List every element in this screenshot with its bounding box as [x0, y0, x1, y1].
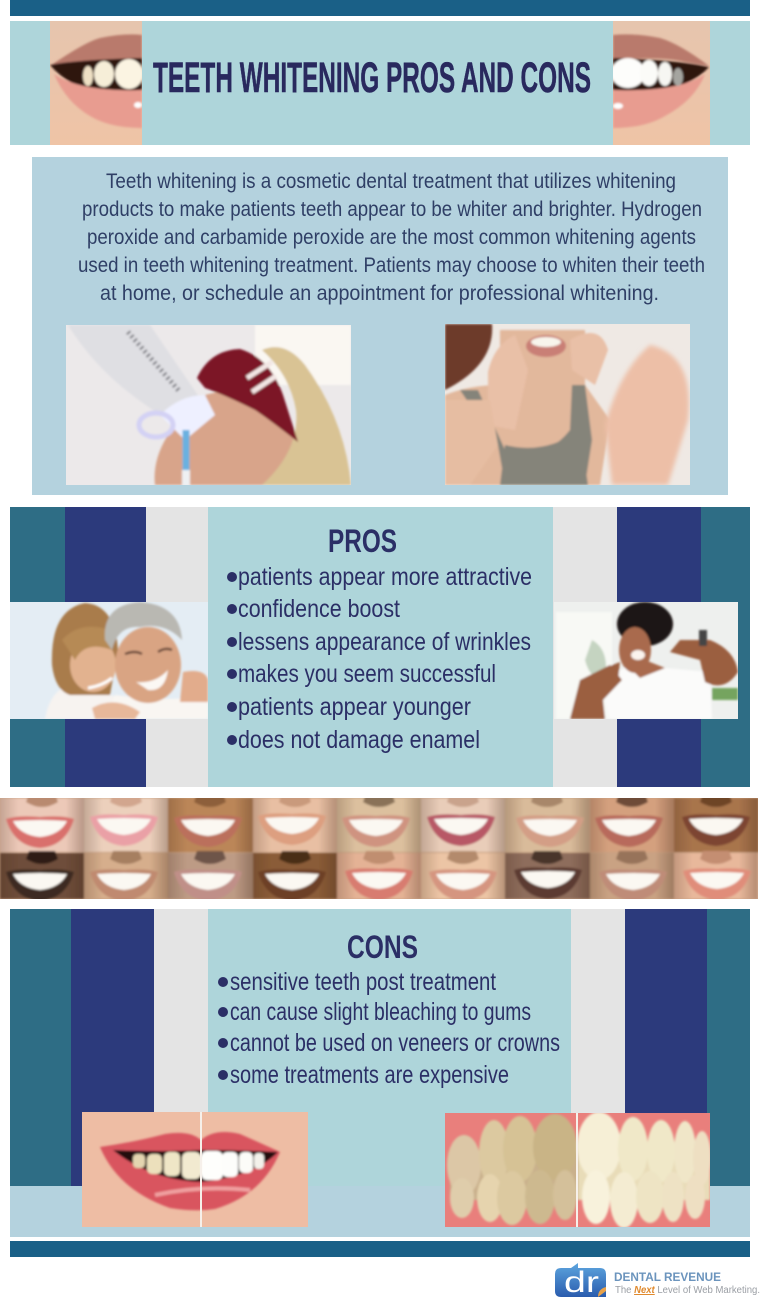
panel: pros [10, 507, 750, 787]
cons list: can cause slight bleaching to gums [230, 998, 531, 1026]
cons list: sensitive teeth post treatment [230, 968, 496, 996]
cons list: some treatments are expensive [230, 1061, 509, 1089]
header panel [10, 21, 750, 145]
pros heading: PROS [328, 523, 397, 559]
photo: lips before and after [82, 1112, 308, 1227]
logo: dental revenue [555, 1263, 760, 1299]
intro panel [32, 157, 728, 495]
top bar [10, 0, 750, 16]
photo: smiling couple [10, 602, 208, 719]
pros list [227, 563, 532, 754]
cons list: cannot be used on veneers or crowns [230, 1029, 560, 1057]
photo: man pointing at smile [554, 602, 738, 719]
pros list: lessens appearance of wrinkles [238, 628, 531, 656]
icon: dr badge: dr [564, 1266, 599, 1299]
company name: DENTAL REVENUE [614, 1272, 721, 1284]
image: smiling lips left [50, 21, 143, 145]
bottom bar [10, 1241, 750, 1257]
photo: professional whitening lamp [66, 325, 351, 485]
pros list: makes you seem successful [238, 660, 496, 688]
intro text [78, 169, 705, 305]
panel: cons [10, 909, 750, 1237]
pros list: confidence boost [238, 595, 400, 623]
cons list [218, 968, 560, 1089]
icon: dr badge [555, 1263, 606, 1299]
photo: teeth before and after [445, 1112, 711, 1228]
tagline: The Next Level of Web Marketing. [615, 1285, 760, 1296]
photo strip: smiles [0, 794, 759, 901]
intro text: at home, or schedule an appointment for professional whitening. [100, 281, 659, 305]
photo: at-home whitening strips [445, 324, 690, 485]
cons heading: CONS [347, 929, 418, 965]
pros list: patients appear more attractive [238, 563, 532, 591]
image: smiling lips right [611, 21, 710, 145]
pros list: does not damage enamel [238, 726, 480, 754]
pros list: patients appear younger [238, 693, 471, 721]
intro text: Teeth whitening is a cosmetic dental treatment that utilizes whitening [106, 169, 676, 193]
